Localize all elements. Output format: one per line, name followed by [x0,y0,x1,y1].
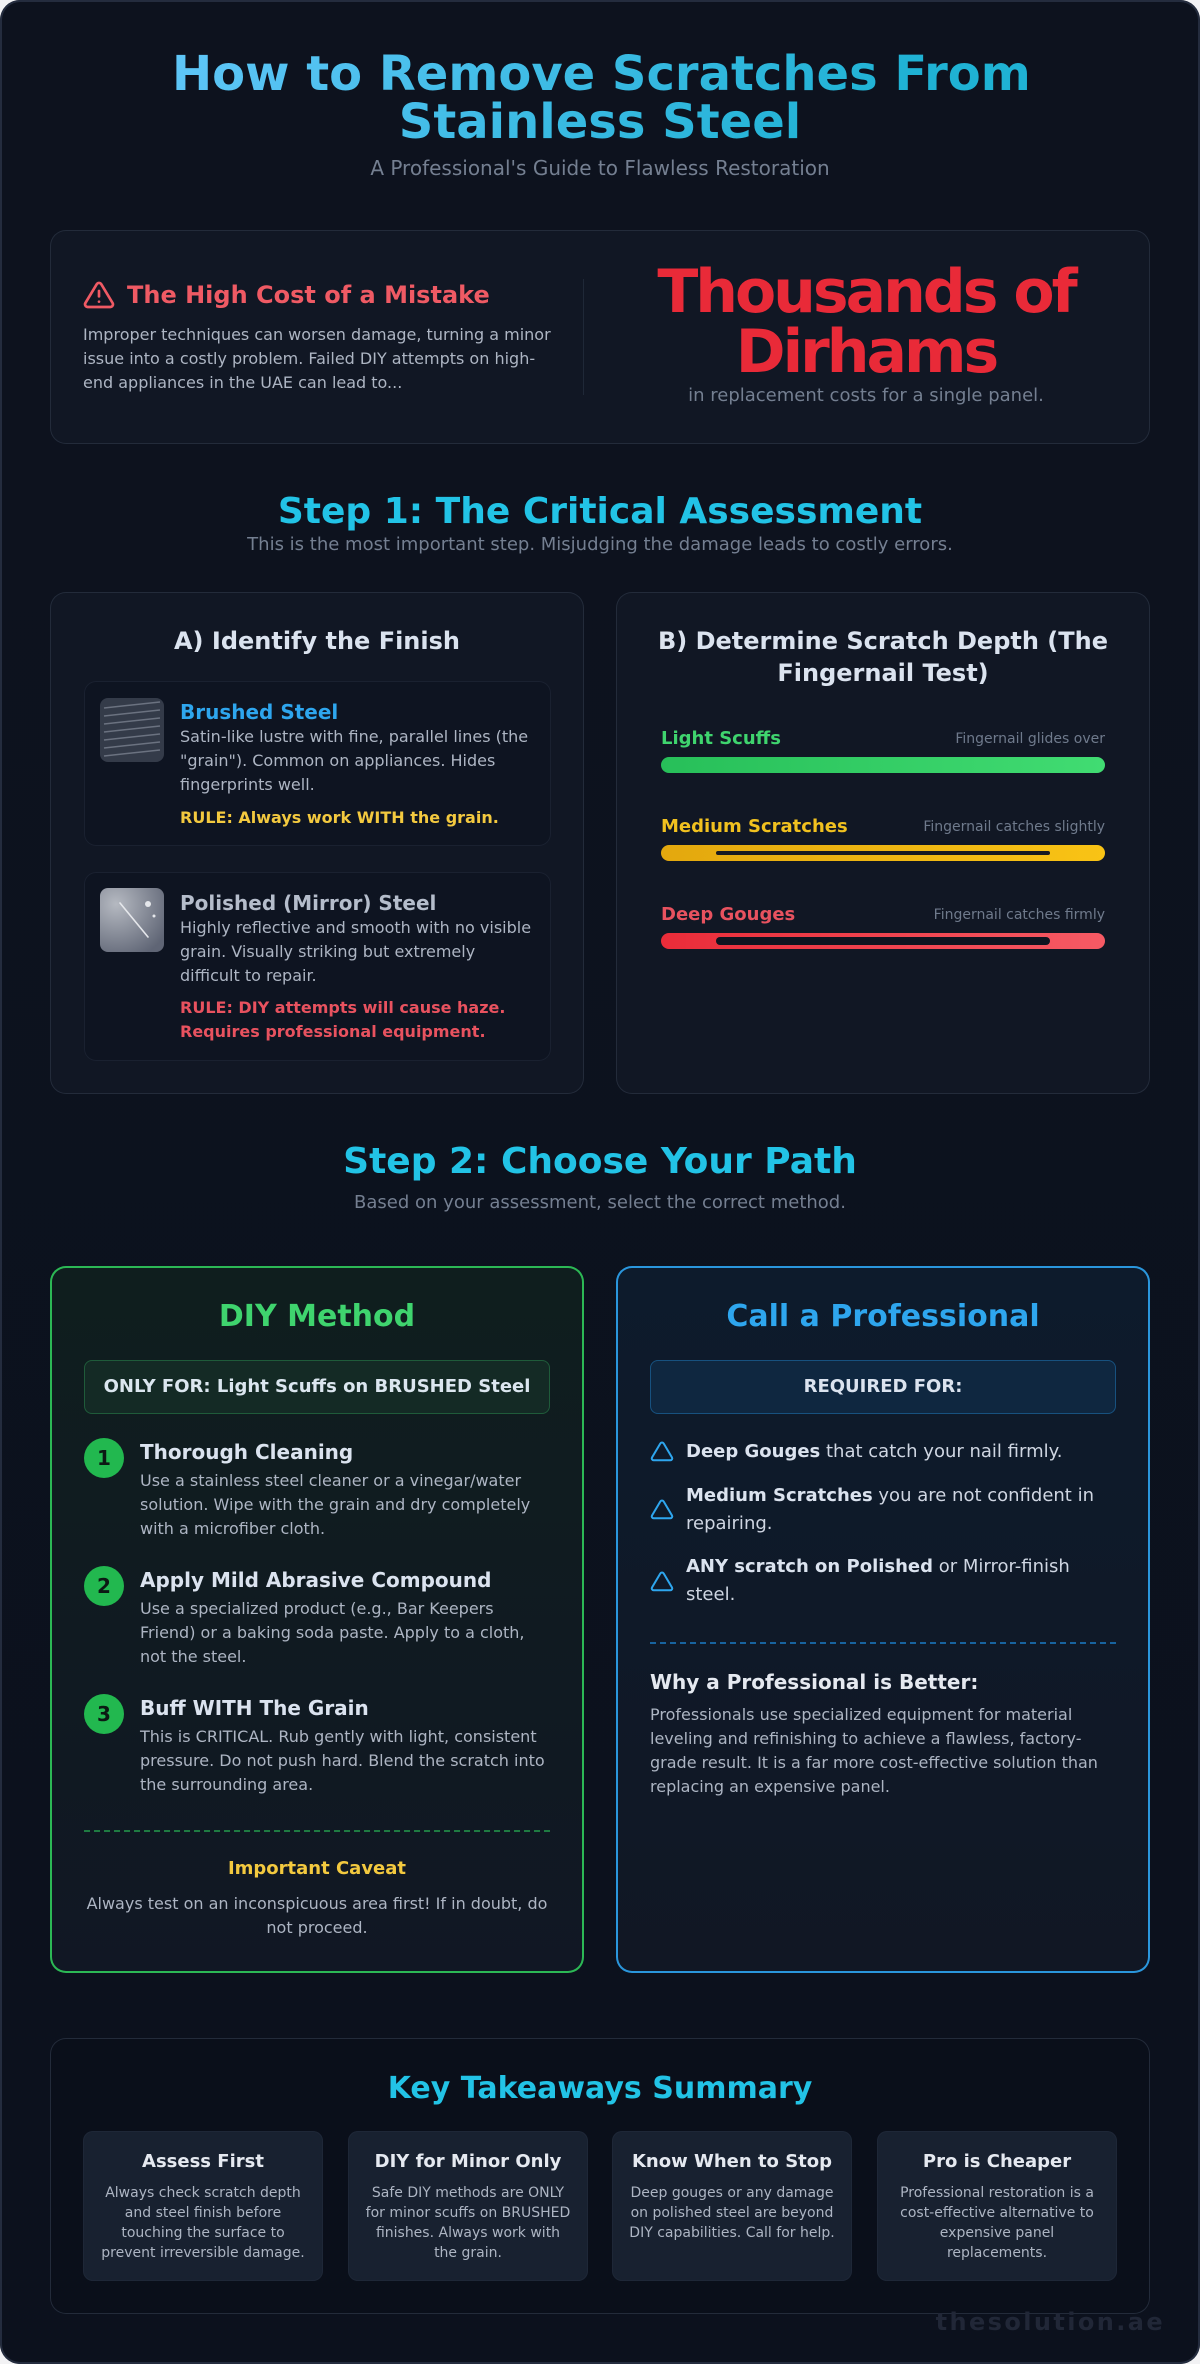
banner text: REQUIRED FOR: [804,1376,962,1397]
heading: step 2: Step 2: Choose Your Path [343,1141,857,1182]
card title: DIY for Minor Only [375,2151,561,2172]
icon: list triangle 3 [650,1572,674,1592]
list item 1: Deep Gouges that catch your nail firmly. [686,1441,1062,1462]
step number 3 [84,1694,124,1734]
card text: for minor scuffs on BRUSHED [366,2205,570,2221]
bar: deep [661,933,1105,949]
step 2 text: Use a specialized product (e.g., Bar Keepers [140,1599,494,1618]
list item 3 [686,1556,1070,1605]
title: How to Remove Scratches From [172,46,1031,102]
card text: on polished steel are beyond [631,2205,833,2221]
text: brushed description [180,727,528,794]
step 2 text [140,1599,525,1666]
heading: caveat: Important Caveat [228,1858,406,1879]
step 2 title: Apply Mild Abrasive Compound [140,1568,491,1592]
panel: scratch depth [616,592,1150,1094]
card: polished steel [84,872,551,1061]
text: why a professional: replacing an expensive panel. [650,1777,890,1796]
card title: Assess First [142,2151,264,2172]
card text [101,2185,305,2261]
subheading: step 2: Based on your assessment, select the correct method. [354,1192,846,1213]
note: glides over: Fingernail glides over [955,731,1105,747]
step 3 title: Buff WITH The Grain [140,1696,369,1720]
icon: list triangle 2 [650,1500,674,1520]
card text: touching the surface to [121,2225,285,2241]
note: catches slightly: Fingernail catches slightly [923,819,1105,835]
step 2 text: not the steel. [140,1647,246,1666]
heading: DIY method: DIY Method [219,1299,415,1334]
rule: polished [180,998,505,1041]
rule: polished: Requires professional equipment. [180,1022,486,1041]
heading: step 1: Step 1: The Critical Assessment [278,491,922,532]
label: medium scratches: Medium Scratches [661,816,848,837]
card: know when to stop [612,2131,852,2281]
card text: prevent irreversible damage. [101,2245,305,2261]
heading: scratch depth [658,627,1108,687]
heading: scratch depth: Fingernail Test) [777,659,989,687]
card text: Deep gouges or any damage [630,2185,834,2201]
step number 1: 1 [97,1446,111,1470]
text: caveat: Always test on an inconspicuous area first! If in doubt, do [87,1894,547,1913]
step 1 text: with a microfiber cloth. [140,1519,325,1538]
step number 1 [84,1438,124,1478]
text: polished description: grain. Visually striking but extremely [180,942,475,961]
heading: call a professional: Call a Professional [726,1299,1040,1334]
card: brushed steel [84,681,551,846]
list item 2 [686,1485,1094,1534]
depth row: deep gouges [661,904,1105,949]
list item 3: steel. [686,1584,735,1605]
text: why a professional: grade result. It is a far more cost-effective solution than [650,1753,1098,1772]
heading: scratch depth: B) Determine Scratch Depth (The [658,627,1108,655]
label: polished steel: Polished (Mirror) Steel [180,891,436,915]
panel: DIY method [50,1266,584,1973]
text: caveat: not proceed. [266,1918,368,1937]
text: caveat [86,1894,547,1937]
text: mistake explanation: issue into a costly problem. Failed DIY attempts on high- [83,349,535,368]
icon: warning triangle [84,282,114,308]
card text: Safe DIY methods are ONLY [372,2185,564,2201]
step 1 title: Thorough Cleaning [140,1440,353,1464]
text: why a professional: leveling and refinishing to achieve a flawless, factory- [650,1729,1082,1748]
step number 2: 2 [97,1574,111,1598]
step 1 text [140,1471,530,1538]
text: polished description [180,918,531,985]
list item 2: Medium Scratches you are not confident in [686,1485,1094,1506]
text: mistake explanation: end appliances in the UAE can lead to... [83,373,402,392]
card text: expensive panel [940,2225,1054,2241]
big cost figure: Dirhams [736,317,996,387]
list item 2: repairing. [686,1513,772,1534]
step 1 text: solution. Wipe with the grain and dry completely [140,1495,530,1514]
scratch groove [716,851,1050,855]
card title: Pro is Cheaper [923,2151,1071,2172]
title [172,50,1028,146]
card text: DIY capabilities. Call for help. [629,2225,835,2241]
text: why a professional [650,1705,1098,1796]
gouge groove [716,937,1050,945]
heading: identify the finish: A) Identify the Finish [174,627,460,655]
text: why a professional: Professionals use specialized equipment for material [650,1705,1072,1724]
bar: light [661,757,1105,773]
step number 2 [84,1566,124,1606]
heading: high cost: The High Cost of a Mistake [127,281,490,309]
note: catches firmly: Fingernail catches firmly [934,907,1105,923]
step 3 text [140,1727,545,1794]
label: light scuffs: Light Scuffs [661,728,781,749]
text: brushed description: fingerprints well. [180,775,315,794]
depth row: light scuffs [661,728,1105,773]
text: brushed description: Satin-like lustre with fine, parallel lines (the [180,727,528,746]
card text: cost-effective alternative to [900,2205,1094,2221]
bar: medium [661,845,1105,861]
subheading: step 1: This is the most important step. Misjudging the damage leads to costly errors. [247,534,953,555]
step 3 text: the surrounding area. [140,1775,313,1794]
banner: only for [84,1360,550,1414]
depth row: medium scratches [661,816,1105,861]
icon: polished steel [100,888,164,952]
panel: identify the finish [50,592,584,1094]
panel: key takeaways [50,2038,1150,2314]
step 1 text: Use a stainless steel cleaner or a vinegar/water [140,1471,521,1490]
card: DIY for minor only [348,2131,588,2281]
text: mistake explanation [83,325,551,392]
card text: replacements. [947,2245,1047,2261]
card text: Always check scratch depth [105,2185,301,2201]
big cost figure: Thousands of [657,257,1075,327]
list item 3: ANY scratch on Polished or Mirror-finish [686,1556,1070,1577]
heading: key takeaways: Key Takeaways Summary [388,2071,812,2106]
card text [366,2185,570,2261]
big cost figure [657,257,1078,387]
divider [583,279,584,395]
card text: and steel finish before [125,2205,281,2221]
step 3 text: This is CRITICAL. Rub gently with light, consistent [140,1727,537,1746]
card: pro is cheaper [877,2131,1117,2281]
text: mistake explanation: Improper techniques can worsen damage, turning a minor [83,325,551,344]
panel: call a professional [616,1266,1150,1973]
step number 3: 3 [97,1702,111,1726]
panel: high cost of a mistake [50,230,1150,444]
rule: polished: RULE: DIY attempts will cause haze. [180,998,505,1017]
text: polished description: difficult to repair. [180,966,317,985]
text: brushed description: "grain"). Common on appliances. Hides [180,751,495,770]
banner: required for [650,1360,1116,1414]
card text [629,2185,835,2241]
heading: why a professional: Why a Professional is Better: [650,1670,978,1694]
card title: Know When to Stop [632,2151,832,2172]
text: replacement cost caption: in replacement costs for a single panel. [688,385,1044,406]
label: deep gouges: Deep Gouges [661,904,795,925]
step 3 text: pressure. Do not push hard. Blend the scratch into [140,1751,545,1770]
card: assess first [83,2131,323,2281]
icon: list triangle 1 [650,1442,674,1462]
rule: brushed: RULE: Always work WITH the grain. [180,808,499,827]
label: brushed steel: Brushed Steel [180,700,338,724]
subtitle: A Professional's Guide to Flawless Restoration [370,156,830,180]
card text [900,2185,1094,2261]
card text: the grain. [434,2245,502,2261]
title: Stainless Steel [399,94,801,150]
watermark: thesolution.ae [936,2308,1165,2336]
icon: brushed steel [100,698,164,762]
card text: Professional restoration is a [900,2185,1094,2201]
step 2 text: Friend) or a baking soda paste. Apply to a cloth, [140,1623,525,1642]
text: polished description: Highly reflective and smooth with no visible [180,918,531,937]
banner text: ONLY FOR: Light Scuffs on BRUSHED Steel [104,1376,530,1397]
card text: finishes. Always work with [376,2225,560,2241]
